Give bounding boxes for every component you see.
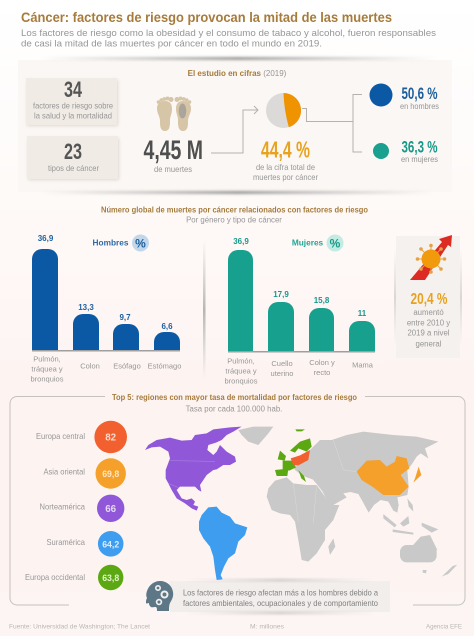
ranking: Europa occidental: 63,8 <box>102 573 119 584</box>
category labels: Pulmón, <box>33 354 61 364</box>
arrow: muertes to pie <box>211 106 258 153</box>
footer: Fuente: Universidad de Washington; The Lancet <box>9 624 150 630</box>
ranking: Suramérica: Suramérica <box>46 537 85 547</box>
stat: 44,4%: de la cifra total de <box>256 162 315 172</box>
legend: mujeres <box>292 234 344 252</box>
bar chart: mujeres <box>225 234 375 386</box>
panel heading: El estudio en cifras (2019) <box>188 69 287 78</box>
divider <box>203 240 206 380</box>
section subheading: Tasa por cada 100.000 hab. <box>186 404 282 414</box>
ranking: Suramérica: 64,2 <box>102 539 119 550</box>
section heading: número global: Por género y tipo de cáncer <box>186 216 282 224</box>
ranking: Europa occidental <box>25 565 123 590</box>
category labels: recto <box>314 368 330 377</box>
category labels: Esófago <box>113 362 141 370</box>
category labels: Cuello <box>271 359 293 368</box>
values: 36,9 <box>38 234 54 243</box>
callout: hombres: factores ambientales, ocupacionales y de comportamiento <box>183 598 378 608</box>
title: Cáncer: factores de riesgo provocan la mitad de las muertes <box>21 10 392 25</box>
legend: mujeres: Mujeres <box>292 238 324 248</box>
ranking: Asia oriental <box>44 458 126 489</box>
bars <box>228 250 375 351</box>
legend: hombres: Hombres <box>93 238 129 248</box>
category labels: Pulmón, <box>227 356 255 366</box>
ranking: Europa central: 82 <box>105 432 117 444</box>
section heading: número global <box>101 204 368 224</box>
category labels: Colon <box>80 362 100 370</box>
stat box: 34 factores: la salud y la mortalidad <box>34 110 112 120</box>
category labels <box>225 356 374 386</box>
map: borders <box>168 440 357 523</box>
callout: aumento 20,4%: 2019 a nivel <box>407 328 450 338</box>
bars <box>32 249 180 350</box>
map: south america <box>199 507 247 580</box>
values: 36,9 <box>233 237 249 246</box>
category labels: Colon y <box>309 358 335 367</box>
bar chart: hombres <box>31 234 181 384</box>
stat box: 23 tipos: tipos de cáncer <box>48 163 99 173</box>
footer: M: millones <box>250 624 285 630</box>
category labels: bronquios <box>225 376 258 386</box>
map: east asia <box>357 456 421 495</box>
legend: mujeres: % <box>330 236 341 250</box>
legend: hombres: % <box>135 236 146 250</box>
map: central europe <box>291 450 310 465</box>
bracket connector <box>302 94 362 152</box>
ranking: Norteamérica: 66 <box>105 504 117 515</box>
stat: mujeres: en mujeres <box>401 154 438 164</box>
stat box: 34 factores: factores de riesgo sobre <box>33 100 113 110</box>
icon: feet <box>157 96 191 131</box>
stat box: 23 tipos: 23 <box>64 139 82 164</box>
category labels: Estómago <box>148 362 181 370</box>
ranking: Europa central: Europa central <box>36 431 85 441</box>
category labels: Mama <box>352 360 374 370</box>
stat: mujeres: 36,3 % <box>402 138 438 156</box>
chart: pie 44,4% <box>266 93 301 128</box>
values <box>38 234 173 331</box>
callout: aumento 20,4%: aumentó <box>413 308 444 317</box>
callout: aumento 20,4% <box>394 235 462 358</box>
icon: head with gears <box>146 581 173 611</box>
values: 9,7 <box>119 313 131 322</box>
category labels: tráquea y <box>31 364 63 374</box>
footer <box>9 624 462 630</box>
intro text: Los factores de riesgo como la obesidad y el consumo de tabaco y alcohol, fueron responsables <box>21 28 436 38</box>
category labels <box>31 354 181 384</box>
stat: 4,45 M: de muertes <box>154 164 192 174</box>
values: 11 <box>358 309 367 318</box>
callout: aumento 20,4%: 20,4 % <box>410 291 448 308</box>
ranking: Norteamérica: Norteamérica <box>40 502 85 512</box>
category labels: bronquios <box>31 374 64 384</box>
stat: mujeres <box>373 138 438 164</box>
intro text: de casi la mitad de las muertes por cáncer en todo el mundo en 2019. <box>21 38 322 48</box>
stat: hombres: en hombres <box>400 101 439 111</box>
stat box: 34 factores: 34 <box>64 77 83 102</box>
stat: 4,45 M: 4,45 M <box>144 135 203 165</box>
ranking: Suramérica <box>46 531 123 557</box>
callout: hombres: Los factores de riesgo afectan más a los hombres debido a <box>183 588 378 598</box>
category labels: tráquea y <box>225 366 257 376</box>
section heading: Top 5: regiones con mayor tasa de mortalidad por factores de riesgo <box>112 392 357 402</box>
callout: aumento 20,4%: general <box>415 340 442 348</box>
panel: top 5 regiones <box>10 392 465 605</box>
callout: hombres <box>146 579 390 614</box>
stat box: 34 factores <box>26 77 118 126</box>
panel: el estudio en cifras <box>18 57 452 194</box>
map: gray world <box>238 427 457 577</box>
ranking: Asia oriental: 69,8 <box>102 469 119 480</box>
stat: 44,4%: muertes por cáncer <box>253 172 318 182</box>
ranking: Norteamérica <box>40 495 124 522</box>
stat: hombres <box>370 84 439 111</box>
map: western europe <box>275 429 312 482</box>
map: north america <box>145 427 242 511</box>
values: 6,6 <box>161 322 173 331</box>
values: 17,9 <box>273 290 289 299</box>
world map <box>145 427 457 580</box>
ranking: Europa occidental: Europa occidental <box>25 572 85 582</box>
ranking: Europa central <box>36 421 127 453</box>
stat: hombres: 50,6 % <box>402 85 438 103</box>
intro text <box>21 28 436 48</box>
stat: 4,45 M <box>144 135 203 174</box>
category labels: uterino <box>271 369 293 378</box>
icon: rising arrow with virus <box>410 235 452 280</box>
section heading: número global: Número global de muertes por cáncer relacionados con factores de riesgo <box>101 204 368 214</box>
stat box: 23 tipos <box>27 136 119 180</box>
stat: 44,4%: 44,4 % <box>261 136 310 162</box>
footer: Agencia EFE <box>426 624 462 630</box>
legend: hombres <box>93 234 149 252</box>
callout: aumento 20,4%: entre 2010 y <box>407 318 450 328</box>
values: 15,8 <box>314 296 330 305</box>
values: 13,3 <box>78 303 94 312</box>
values <box>233 237 367 318</box>
ranking: Asia oriental: Asia oriental <box>44 466 85 476</box>
stat: 44,4% <box>253 136 318 182</box>
